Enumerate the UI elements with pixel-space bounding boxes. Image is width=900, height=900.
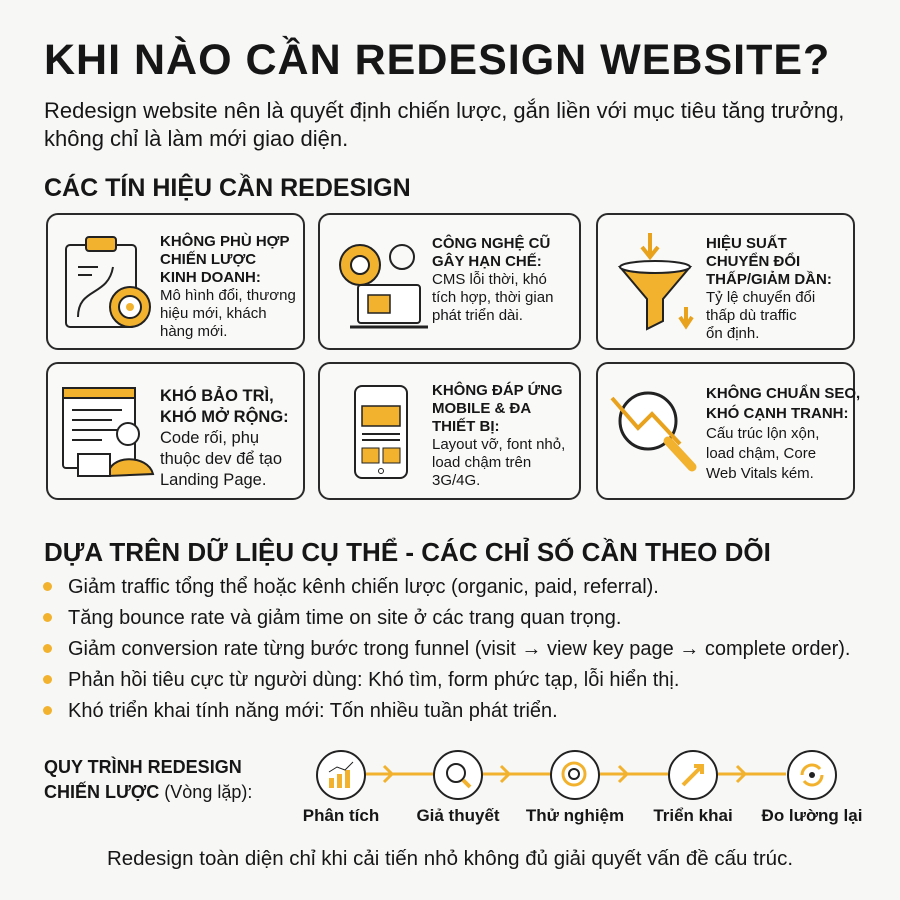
card: seo [596,362,855,500]
text: load chậm, Core [706,445,816,462]
subtitle: không chỉ là làm mới giao diện. [44,126,348,151]
text: hàng mới. [160,323,227,340]
card: mobile [318,362,581,500]
text: thấp dù traffic [706,307,797,324]
title: KHI NÀO CẦN REDESIGN WEBSITE? [44,36,830,84]
text: hiệu mới, khách [160,305,267,322]
text: KHÓ MỞ RỘNG: [160,408,289,426]
process label: QUY TRÌNH REDESIGN [44,757,242,777]
heading: metrics: DỰA TRÊN DỮ LIỆU CỤ THỂ - CÁC CHỈ SỐ CẦN THEO DÕI [44,537,771,567]
step: measure [762,750,862,825]
text: Web Vitals kém. [706,465,814,482]
step: analyze: Phân tích [303,806,379,825]
text: ổn định. [706,325,759,342]
icon: gears laptop [339,244,428,328]
text: THIẾT BỊ: [432,418,500,435]
step: deploy [653,750,733,825]
text: thuộc dev để tạo [160,450,282,468]
text: load chậm trên [432,454,531,471]
text [160,386,289,489]
text: CHUYỂN ĐỔI [706,253,800,270]
step: test: Thử nghiệm [526,806,624,825]
card: tech [318,213,581,350]
text: Layout vỡ, font nhỏ, [432,436,565,453]
step: deploy: Triển khai [653,806,733,825]
process label: CHIẾN LƯỢC (Vòng lặp): [44,782,252,802]
icon: clipboard target [65,236,151,328]
text: phát triển dài. [432,307,523,324]
heading: signals: CÁC TÍN HIỆU CẦN REDESIGN [44,174,411,202]
text: KINH DOANH: [160,269,261,286]
text: KHÓ CẠNH TRANH: [706,405,848,422]
text: CMS lỗi thời, khó [432,271,547,288]
text [160,232,296,340]
subtitle: Redesign website nên là quyết định chiến lược, gắn liền với mục tiêu tăng trưởng, [44,98,844,123]
card: conversion [596,213,855,350]
text: GÂY HẠN CHẾ: [432,253,542,270]
bullet list: Giảm conversion rate từng bước trong funnel (visit → view key page → complete order). [68,638,850,660]
text: 3G/4G. [432,472,480,489]
text: tích hợp, thời gian [432,289,553,306]
bullet list: Giảm traffic tổng thể hoặc kênh chiến lược (organic, paid, referral). [68,576,659,598]
text: Mô hình đổi, thương [160,287,296,304]
bullet list: Khó triển khai tính năng mới: Tốn nhiều tuần phát triển. [68,700,558,722]
card: strategy [46,213,305,350]
text [706,384,860,482]
text: CHIẾN LƯỢC [160,251,256,268]
text: Tỷ lệ chuyển đổi [706,289,815,306]
text: Code rối, phụ [160,429,259,447]
text [706,234,832,342]
bullet list: Phản hồi tiêu cực từ người dùng: Khó tìm, form phức tạp, lỗi hiển thị. [68,669,679,691]
step: analyze [303,750,379,825]
text: KHÔNG ĐÁP ỨNG [432,382,563,399]
step: hypothesis [416,750,500,825]
text: CÔNG NGHỆ CŨ [432,235,550,252]
text [432,382,565,489]
text: Cấu trúc lộn xộn, [706,425,819,442]
card: maintenance [46,362,305,500]
text [432,234,553,324]
footer note: Redesign toàn diện chỉ khi cải tiến nhỏ không đủ giải quyết vấn đề cấu trúc. [107,847,793,870]
text: KHÔNG CHUẨN SEO, [706,385,860,402]
text: Landing Page. [160,471,266,489]
process label [44,756,252,802]
text: MOBILE & ĐA [432,400,531,417]
icon: phone [354,385,408,479]
icon: magnifier chart [610,392,696,472]
text: HIỆU SUẤT [706,235,787,252]
bullet list: Tăng bounce rate và giảm time on site ở các trang quan trọng. [68,607,621,629]
text: KHÓ BẢO TRÌ, [160,387,274,405]
text: KHÔNG PHÙ HỢP [160,233,289,250]
subtitle [44,98,844,151]
step: measure: Đo lường lại [762,806,862,825]
icon: funnel [618,233,694,331]
text: THẤP/GIẢM DẦN: [706,271,832,288]
icon: developer [62,387,154,477]
step: hypothesis: Giả thuyết [416,806,500,825]
step: test [526,750,624,825]
bullet list [43,576,850,722]
